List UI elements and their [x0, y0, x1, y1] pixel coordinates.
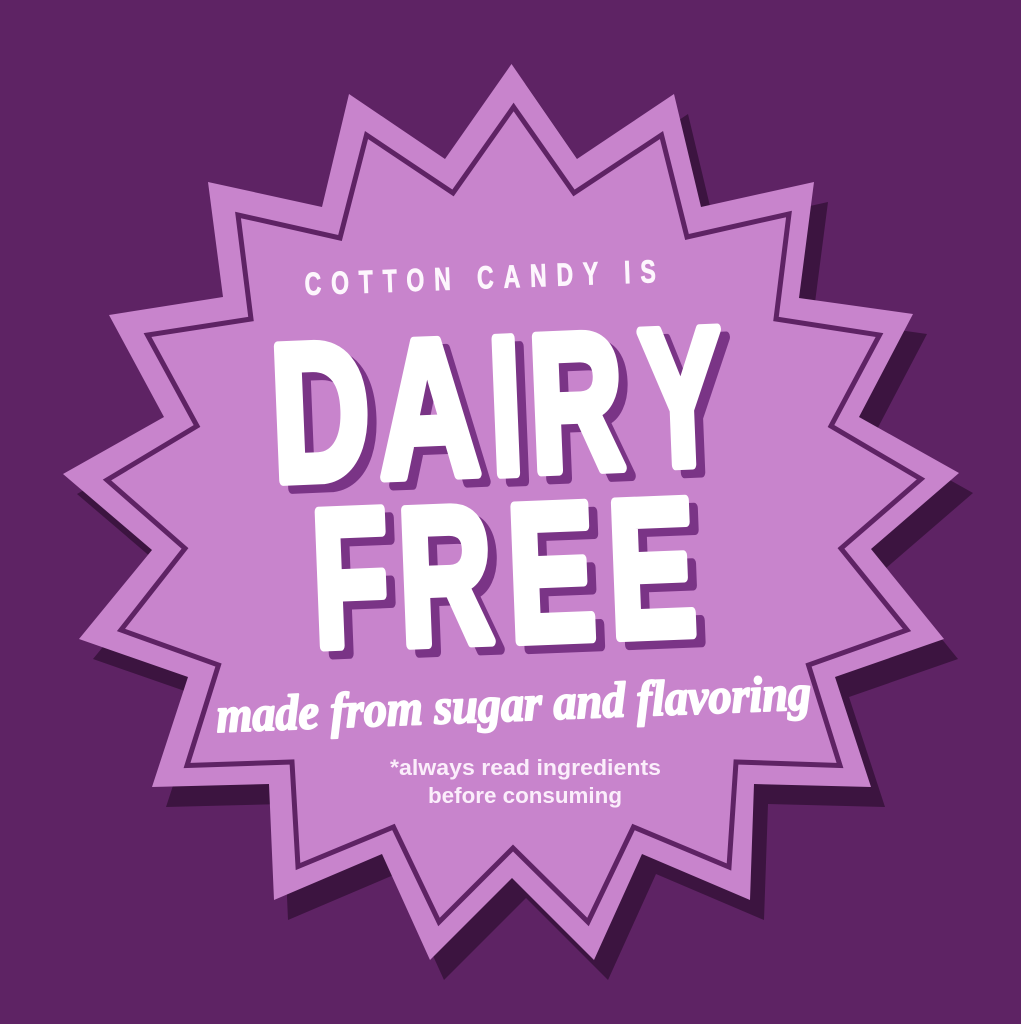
free white letters	[308, 459, 700, 688]
dairy extruded shadow	[276, 294, 736, 531]
free white letters: F	[308, 467, 393, 688]
dairy white letters: Y	[636, 286, 727, 508]
starburst shadow	[77, 84, 973, 980]
dairy white letters: R	[525, 292, 628, 514]
starburst inner outline	[107, 107, 921, 922]
free white letters: R	[394, 466, 497, 687]
free extruded shadow: F	[317, 475, 402, 696]
dairy extruded shadow: A	[382, 306, 492, 528]
dairy extruded shadow: I	[494, 304, 535, 523]
free white letters: E	[504, 463, 599, 683]
dairy extruded shadow: D	[276, 309, 383, 531]
heading: free (shadow and face)	[308, 459, 709, 696]
dairy white letters: I	[485, 296, 526, 515]
dairy white letters: A	[373, 298, 483, 520]
free extruded shadow: E	[513, 471, 608, 691]
dairy extruded shadow: R	[534, 300, 637, 522]
free extruded shadow: R	[403, 474, 506, 695]
footnote	[390, 755, 661, 808]
dairy white letters	[267, 286, 727, 523]
script tagline: made from sugar and flavoring	[215, 664, 812, 743]
dairy white letters: D	[267, 301, 374, 523]
starburst badge	[63, 64, 959, 960]
dairy extruded shadow: Y	[645, 294, 736, 516]
free white letters: E	[604, 459, 700, 679]
free extruded shadow: E	[613, 467, 709, 687]
footnote line one: *always read ingredients	[390, 755, 661, 780]
eyebrow: cotton candy is: COTTON CANDY IS	[304, 253, 656, 302]
heading: dairy (shadow and face)	[267, 286, 736, 531]
free extruded shadow	[317, 467, 709, 696]
footnote line two: before consuming	[428, 783, 622, 808]
